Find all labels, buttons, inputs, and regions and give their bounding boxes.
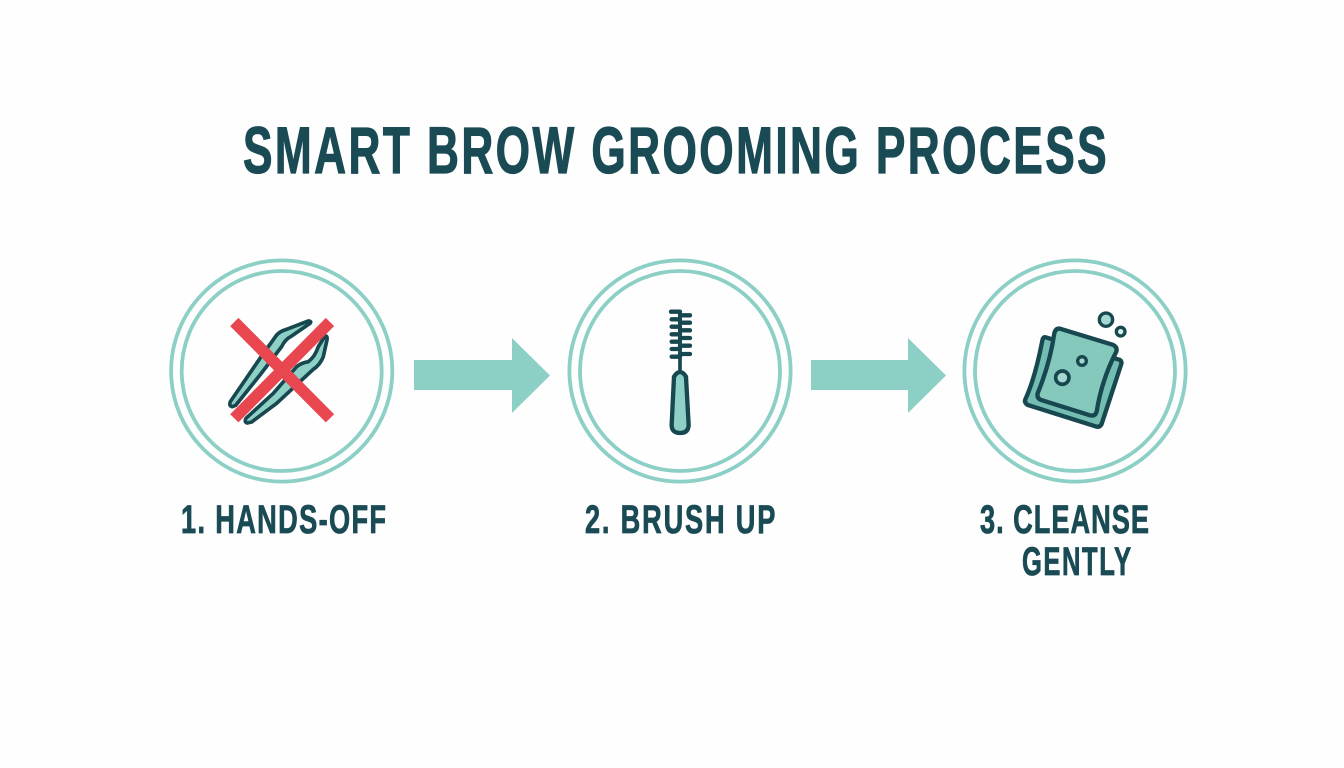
icon: spoolie brush — [671, 312, 690, 433]
title: SMART BROW GROOMING PROCESS — [243, 113, 1107, 187]
step 3 label: GENTLY — [1022, 540, 1131, 585]
step 3 double ring — [964, 260, 1186, 482]
icon: cleansing pad with bubbles — [1025, 313, 1125, 427]
icon: crossed-out tweezers — [230, 321, 330, 423]
arrow 2 — [811, 338, 946, 413]
step 3 label: 3. CLEANSE — [980, 498, 1149, 542]
step 1: hands-off — [171, 260, 392, 542]
arrow 1 — [414, 338, 550, 413]
step 1 label: 1. HANDS-OFF — [181, 498, 386, 542]
step 2: brush up — [569, 260, 791, 542]
step 2 double ring — [569, 260, 791, 482]
step 3 label — [980, 498, 1149, 585]
step 3: cleanse gently — [964, 260, 1186, 585]
step 2 label: 2. BRUSH UP — [585, 498, 775, 542]
step 1 double ring — [171, 260, 392, 482]
